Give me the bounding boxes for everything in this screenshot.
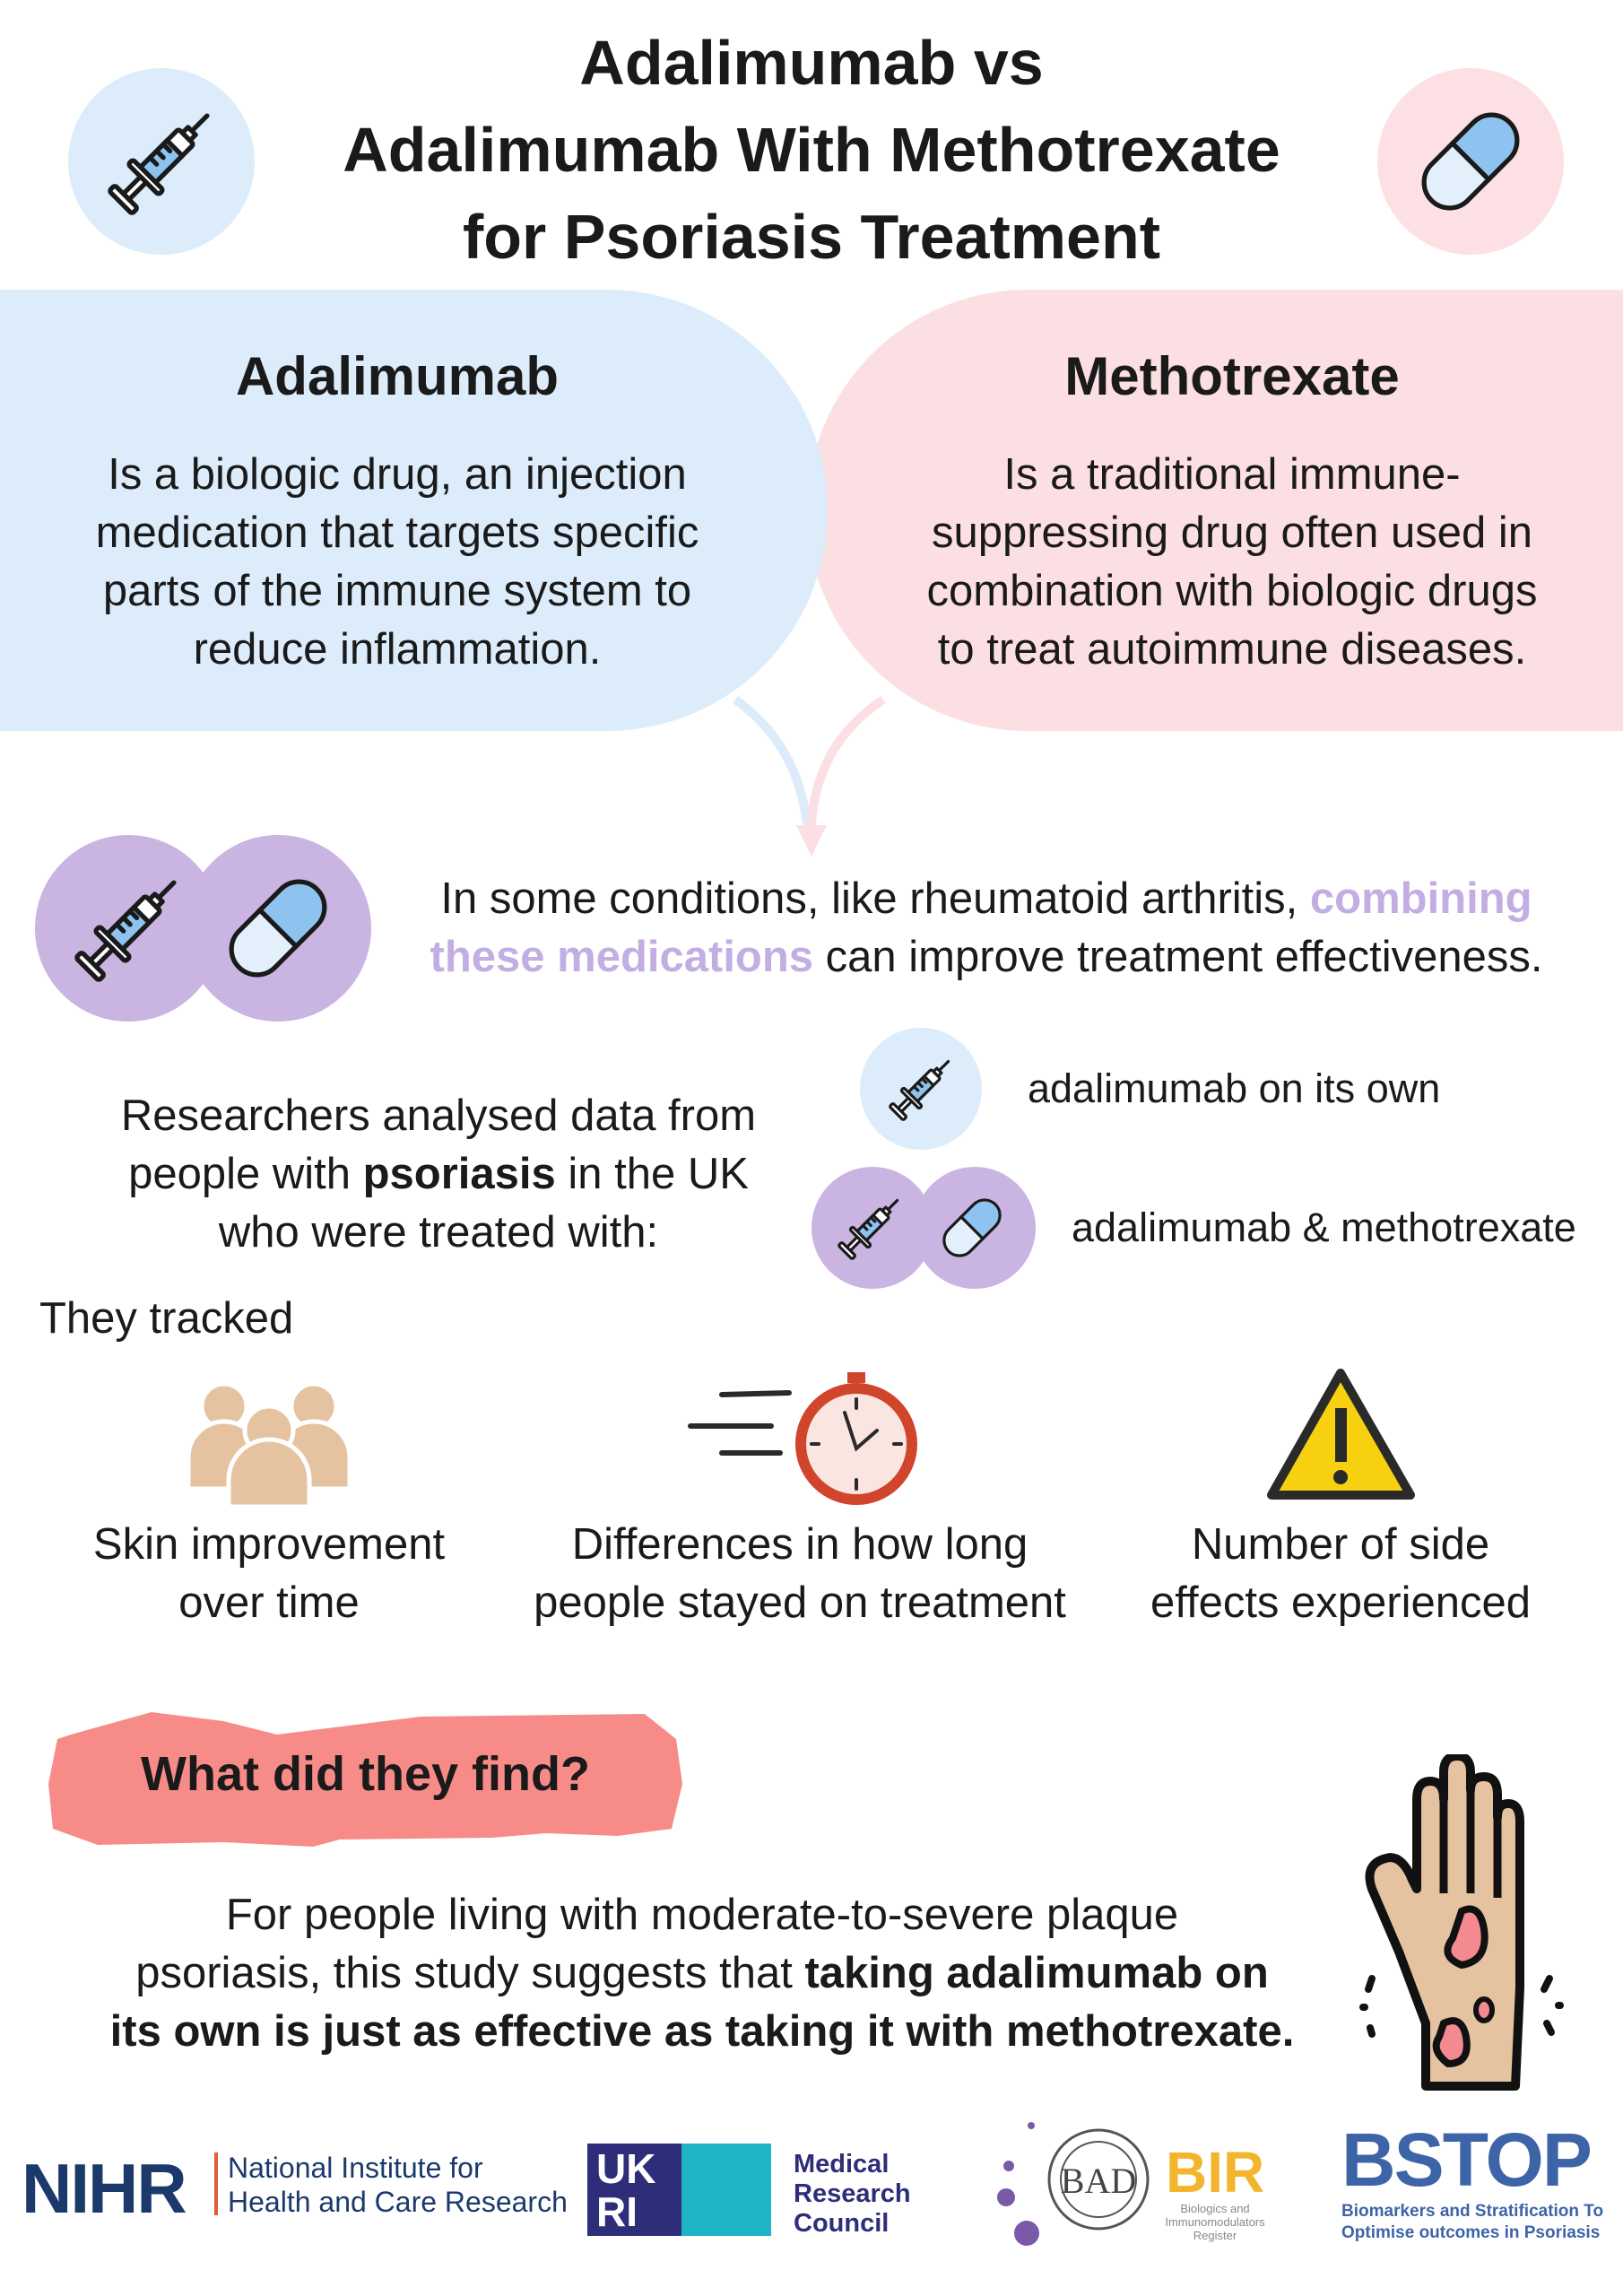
text: adalimumab description: parts of the immune system to	[103, 567, 691, 615]
text: methotrexate description: Is a traditional immune-	[1003, 450, 1461, 499]
text: adalimumab description: medication that targets specific	[96, 509, 699, 557]
text: researchers analysed: Researchers analysed data from	[121, 1091, 756, 1140]
logo: BSTOP: Optimise outcomes in Psoriasis	[1341, 2223, 1600, 2242]
label: side effects	[1150, 1520, 1531, 1627]
logo: BAD BIR: Register	[1193, 2229, 1237, 2242]
heading: methotrexate: Methotrexate	[1064, 346, 1400, 406]
text: adalimumab description: Is a biologic drug, an injection	[108, 450, 687, 499]
title: for Psoriasis Treatment	[463, 202, 1160, 272]
label: skin improvement	[93, 1520, 445, 1627]
logo: BSTOP: Biomarkers and Stratification To	[1341, 2202, 1603, 2221]
label: treatment duration: Differences in how long	[572, 1520, 1028, 1569]
text: conclusion: For people living with moderate-to-severe plaque	[226, 1891, 1178, 1939]
text: conclusion: psoriasis, this study suggests that taking adalimumab on	[135, 1949, 1269, 1997]
text: researchers analysed: who were treated with:	[219, 1208, 658, 1257]
logo: UKRI MRC: RI	[596, 2188, 638, 2235]
label: treatment duration	[534, 1520, 1066, 1627]
logo: NIHR: NIHR	[22, 2149, 186, 2228]
logo: BSTOP: BSTOP	[1341, 2118, 1591, 2202]
label: treatment duration: people stayed on treatment	[534, 1578, 1066, 1627]
arrows: merging	[733, 696, 886, 856]
panel: methotrexate	[807, 290, 1623, 731]
icon: syringe circle	[68, 68, 255, 255]
label: side effects: effects experienced	[1150, 1578, 1531, 1627]
logo: UKRI MRC: Medical	[794, 2150, 889, 2179]
text: methotrexate description	[927, 450, 1537, 674]
text: methotrexate description: to treat autoimmune diseases.	[938, 625, 1526, 674]
logo: BAD BIR: BIR	[1166, 2140, 1264, 2205]
text: adalimumab description	[96, 450, 699, 674]
label: skin improvement: Skin improvement	[93, 1520, 445, 1569]
logo: UKRI MRC	[587, 2144, 911, 2238]
panel: adalimumab	[0, 290, 828, 731]
text: conclusion: its own is just as effective as taking it with methotrexate.	[110, 2007, 1294, 2056]
text: combining medications: these medications can improve treatment effectiveness.	[430, 933, 1542, 981]
text: methotrexate description: combination with biologic drugs	[927, 567, 1537, 615]
logo: UKRI MRC: Research	[794, 2179, 911, 2208]
title	[343, 28, 1280, 272]
icon: stopwatch	[688, 1372, 917, 1505]
logo: NIHR: National Institute for	[228, 2152, 483, 2184]
text: they tracked: They tracked	[39, 1294, 293, 1343]
heading: what did they find: What did they find?	[141, 1747, 590, 1801]
title: Adalimumab With Methotrexate	[343, 115, 1280, 185]
heading: what did they find	[48, 1712, 682, 1847]
icon: hand with psoriasis	[1359, 1754, 1564, 2091]
icon: pill circle	[1377, 68, 1564, 255]
logo: BAD BIR: Immunomodulators	[1165, 2215, 1265, 2229]
text: combining medications	[430, 874, 1542, 981]
text: researchers analysed: people with psoriasis in the UK	[128, 1150, 749, 1198]
icon: adalimumab alone	[860, 1028, 982, 1150]
title: Adalimumab vs	[579, 28, 1044, 98]
text: researchers analysed	[121, 1091, 756, 1257]
icon: combination	[812, 1167, 1036, 1289]
logo: UKRI MRC: UK	[596, 2145, 655, 2192]
label: side effects: Number of side	[1192, 1520, 1489, 1569]
logo: BAD BIR: BAD	[1061, 2161, 1136, 2201]
label: adalimumab & methotrexate: adalimumab & methotrexate	[1072, 1205, 1576, 1250]
logo: BAD BIR	[997, 2122, 1265, 2246]
icon: people	[190, 1387, 348, 1505]
logo: NIHR	[22, 2149, 568, 2228]
text: adalimumab description: reduce inflammation.	[194, 625, 601, 674]
heading: adalimumab: Adalimumab	[236, 346, 559, 406]
label: adalimumab on its own: adalimumab on its own	[1028, 1065, 1440, 1111]
icon: warning	[1267, 1369, 1415, 1500]
logo: NIHR: Health and Care Research	[228, 2186, 568, 2218]
logo: UKRI MRC: Council	[794, 2209, 889, 2238]
text: methotrexate description: suppressing drug often used in	[932, 509, 1532, 557]
text: conclusion	[110, 1891, 1294, 2056]
logo: BSTOP	[1341, 2118, 1603, 2242]
label: skin improvement: over time	[178, 1578, 360, 1627]
icon: combined medications	[35, 835, 371, 1022]
logo: BAD BIR: Biologics and	[1180, 2202, 1250, 2215]
text: combining medications: In some conditions, like rheumatoid arthritis, combining	[440, 874, 1532, 923]
